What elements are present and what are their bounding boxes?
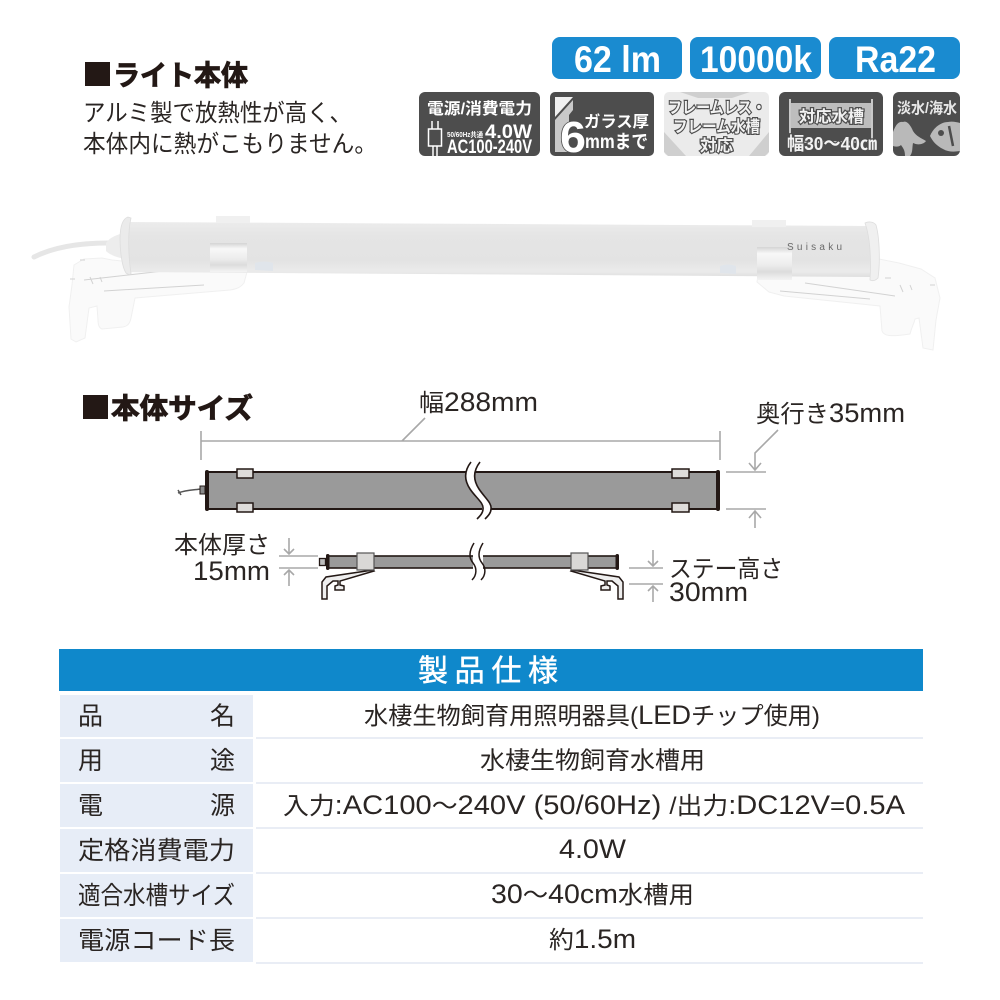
table: product specifications — [59, 649, 923, 964]
tube body — [128, 222, 872, 277]
row: product name: 品 — [78, 702, 103, 730]
row: compatible tank size: 30〜40cm水槽用 — [491, 879, 694, 909]
row: use: 水棲生物飼育水槽用 — [480, 748, 705, 774]
break mark — [466, 463, 491, 519]
icon: glass thickness 6mm: 6 — [560, 113, 586, 162]
dimension: depth 35mm — [726, 398, 905, 528]
row: rated power: 4.0W — [559, 834, 627, 864]
icon: compatible tank width — [779, 92, 883, 156]
dimension: body thickness 15mm: 本体厚さ — [174, 532, 270, 559]
dimension: stay height 30mm — [629, 550, 783, 607]
row: power cord length: 約1.5m — [549, 924, 636, 954]
right stay — [571, 570, 623, 599]
icon: frameless and framed tank: フレーム水槽 — [673, 118, 760, 136]
icon: compatible tank width: 幅30〜40㎝ — [787, 134, 877, 154]
icon: power and consumption: 電源/消費電力 — [427, 100, 532, 118]
text block: light body description: アルミ製で放熱性が高く、 — [83, 100, 352, 127]
row: compatible tank size — [60, 874, 923, 919]
dimension: body thickness 15mm — [174, 532, 318, 586]
photo: LED light product — [34, 216, 940, 350]
row: product name: 名 — [210, 702, 235, 730]
left stay — [322, 570, 374, 599]
icon: glass thickness 6mm — [550, 92, 654, 162]
dimension: width 288mm — [201, 387, 720, 460]
badge: 62 lm — [552, 37, 682, 80]
row: product name: 水棲生物飼育用照明器具(LEDチップ使用) — [364, 700, 820, 730]
power cord — [178, 489, 201, 495]
badge: 62 lm: 62 lm — [574, 39, 661, 80]
row: power cord length — [60, 919, 923, 964]
row: rated power: 定格消費電力 — [78, 837, 235, 865]
dimension: depth 35mm: 奥行き35mm — [756, 398, 905, 428]
dimension: width 288mm: 幅288mm — [419, 387, 538, 417]
badge: Ra22 — [829, 37, 960, 80]
text block: light body description — [83, 100, 377, 158]
brand logo: Suisaku — [787, 242, 842, 253]
icon: frameless and framed tank: フレームレス・ — [668, 100, 766, 117]
left clear clip — [210, 216, 250, 272]
row: product name — [60, 695, 923, 739]
break mark — [473, 554, 483, 570]
icon: power and consumption: 50/60Hz共通 — [447, 130, 483, 139]
icon: glass thickness 6mm: mmまで — [585, 132, 648, 153]
row: use: 用 — [78, 747, 103, 775]
row: power cord length: 電源コード長 — [78, 927, 235, 955]
heading: light body: ライト本体 — [113, 60, 248, 91]
icon: freshwater and saltwater — [893, 92, 960, 156]
row: use: 途 — [210, 747, 235, 775]
row: use — [60, 739, 923, 784]
row: power supply: 源 — [210, 792, 235, 820]
power cable — [34, 243, 108, 257]
dimension: body thickness 15mm: 15mm — [193, 556, 270, 586]
table header — [59, 649, 923, 691]
right clear clip — [752, 220, 792, 280]
right acrylic stay — [757, 255, 940, 350]
badge: 10000k: 10000k — [700, 39, 812, 80]
row: rated power — [60, 829, 923, 874]
left acrylic stay — [69, 258, 247, 342]
left end cap — [106, 233, 126, 259]
row: power supply: 入力:AC100 〜240V (50/60Hz) /出力:DC12V =0.5A — [283, 790, 905, 820]
row: power supply — [60, 784, 923, 829]
icon: glass thickness 6mm: ガラス厚 — [584, 113, 649, 131]
icon: freshwater and saltwater: 淡水/海水 — [897, 100, 957, 117]
icon: frameless and framed tank — [664, 92, 769, 156]
row: power supply: 電 — [78, 792, 103, 820]
icon: compatible tank width: 対応水槽 — [799, 108, 864, 126]
dimension: stay height 30mm: ステー高さ — [669, 556, 783, 583]
icon: power and consumption — [419, 92, 540, 158]
dimension: stay height 30mm: 30mm — [669, 577, 748, 607]
right end cap — [865, 222, 879, 281]
row: compatible tank size: 適合水槽サイズ — [78, 882, 235, 910]
icon: power and consumption: 4.0W — [485, 122, 532, 143]
table header: 製品仕様 — [418, 655, 558, 688]
diagram: top view — [178, 462, 720, 519]
diagram: side view — [320, 543, 623, 599]
icon: power and consumption: AC100-240V — [447, 137, 532, 158]
badge: Ra22: Ra22 — [855, 39, 936, 80]
icon: frameless and framed tank: 対応 — [700, 137, 733, 155]
text block: light body description: 本体内に熱がこもりません。 — [83, 131, 377, 158]
mounting clips — [237, 469, 689, 512]
heading: body size: 本体サイズ — [111, 392, 253, 424]
